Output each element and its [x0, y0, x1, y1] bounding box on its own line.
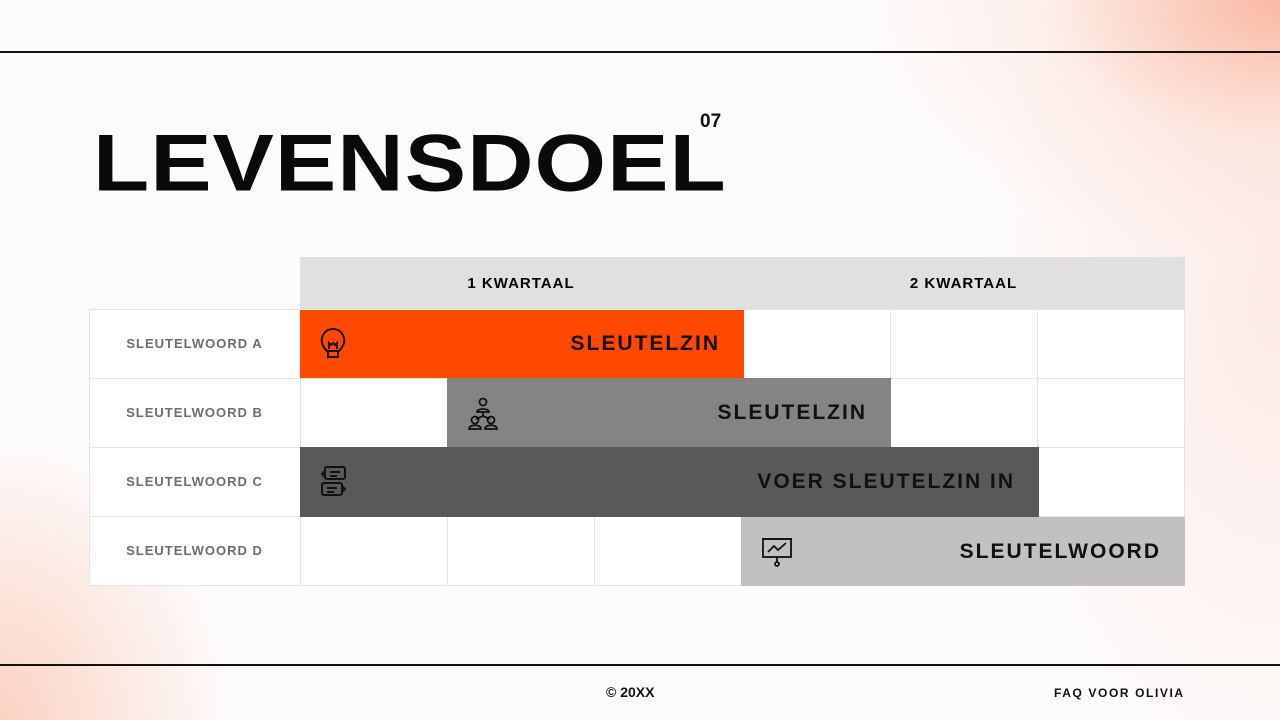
bar B: [447, 378, 891, 447]
bar A: SLEUTELZIN: [570, 332, 720, 355]
icon: people hierarchy: [468, 398, 498, 430]
title: LEVENSDOEL: [93, 118, 727, 208]
bar D: SLEUTELWOORD: [960, 540, 1161, 562]
header row: [300, 257, 1185, 309]
header: 1 kwartaal: 1 KWARTAAL: [467, 274, 575, 292]
row label B: SLEUTELWOORD B: [126, 405, 263, 420]
row label D: SLEUTELWOORD D: [126, 543, 263, 558]
timeline table: [89, 257, 1185, 586]
icon: presentation board: [762, 538, 792, 567]
bar B: SLEUTELZIN: [718, 400, 867, 424]
row label C: SLEUTELWOORD C: [126, 474, 263, 489]
footer: copyright: © 20XX: [606, 684, 654, 700]
bar C: [300, 447, 1039, 517]
footer: author: FAQ VOOR OLIVIA: [1054, 686, 1185, 700]
bar D: [741, 517, 1185, 586]
page number: 07: [700, 111, 721, 132]
bar A: [300, 310, 744, 378]
bar C: VOER SLEUTELZIN IN: [757, 470, 1015, 493]
header: 2 kwartaal: 2 KWARTAAL: [910, 274, 1017, 292]
icon: light bulb: [320, 328, 346, 358]
row label A: SLEUTELWOORD A: [126, 336, 263, 351]
icon: chat bubbles: [320, 466, 346, 496]
